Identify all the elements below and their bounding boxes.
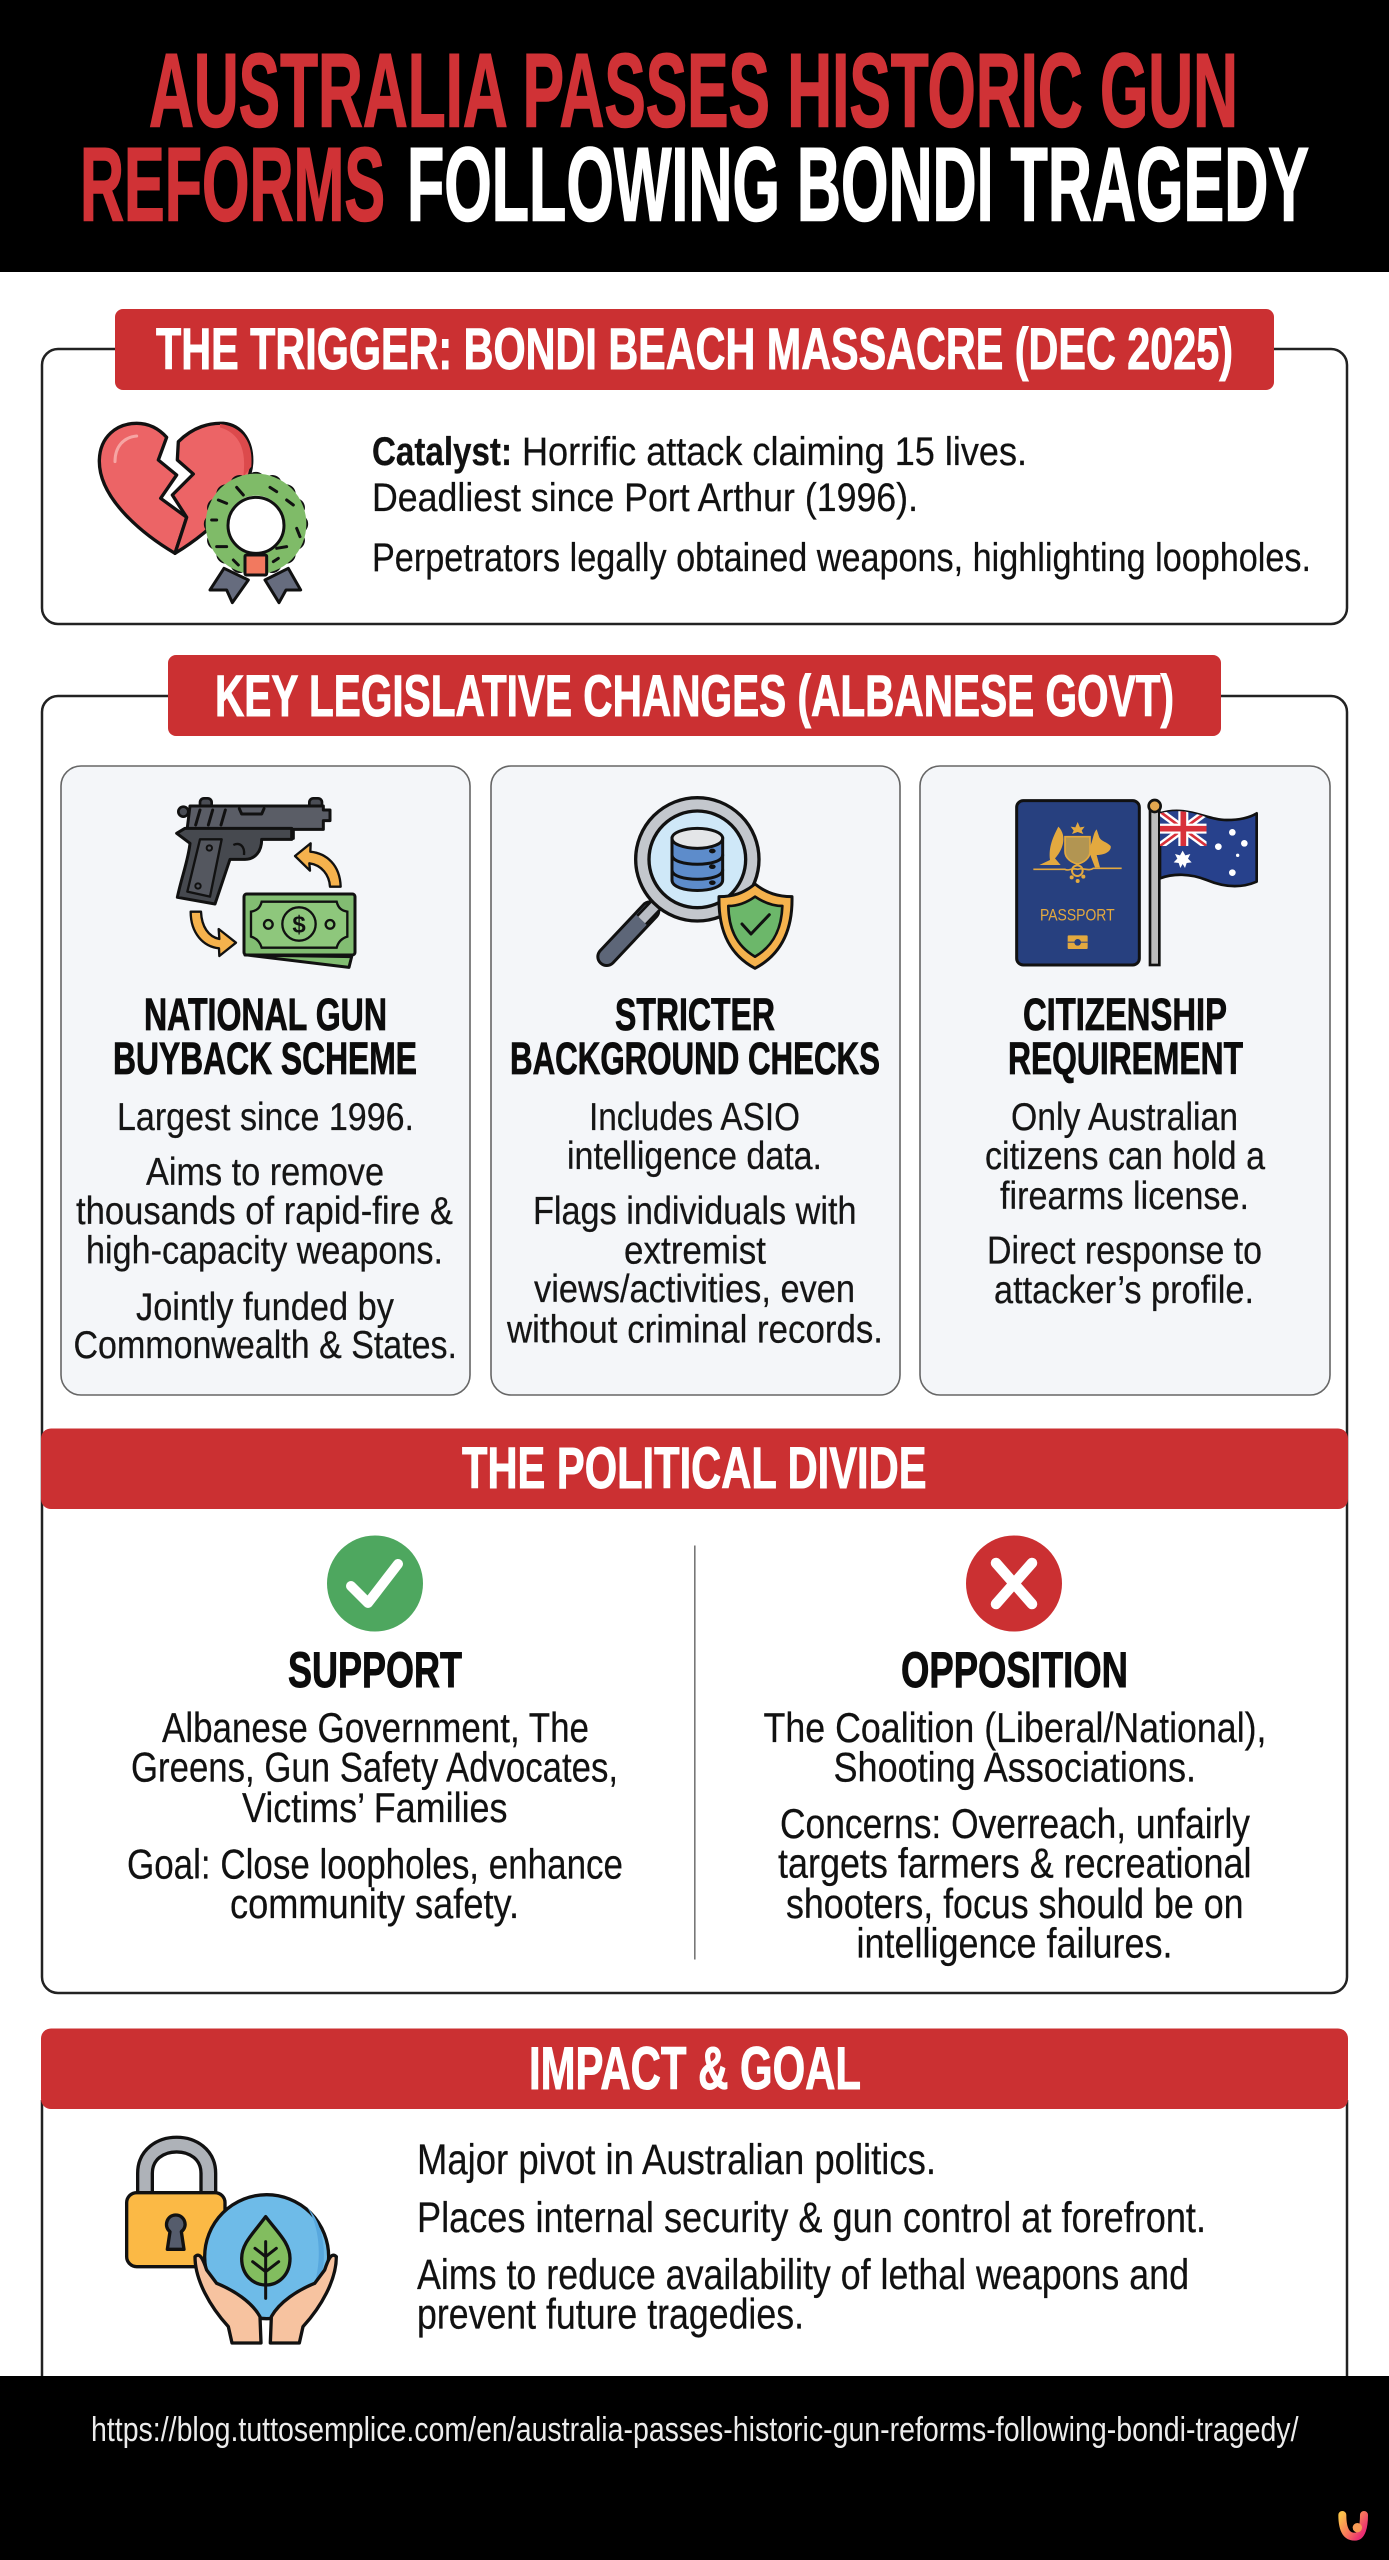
card text: views/activities, even [534, 1268, 855, 1311]
card heading: BACKGROUND CHECKS [510, 1033, 880, 1084]
heading: key legislative changes [168, 655, 1221, 736]
card text: Commonwealth & States. [74, 1324, 457, 1367]
card text: thousands of rapid-fire & [76, 1190, 453, 1233]
card text: extremist [624, 1230, 766, 1272]
card: citizenship requirement [920, 766, 1330, 1395]
footer [0, 2376, 1389, 2560]
card heading: REQUIREMENT [1008, 1033, 1243, 1084]
card text: Includes ASIO [589, 1096, 800, 1139]
column: support [127, 1536, 623, 1927]
heading: impact and goal [41, 2028, 1348, 2109]
card text [985, 1096, 1266, 1312]
text: catalyst: Horrific attack claiming 15 lives. [522, 430, 1027, 474]
card text: Aims to remove [146, 1151, 384, 1194]
card heading: NATIONAL GUN [144, 989, 387, 1040]
card text: firearms license. [1000, 1175, 1249, 1218]
text: impact: prevent future tragedies. [417, 2290, 804, 2338]
icon: pistol and cash swap [177, 798, 355, 967]
card text [74, 1096, 457, 1367]
heading: the political divide: THE POLITICAL DIVIDE [462, 1436, 926, 1501]
icon: red cross [966, 1536, 1062, 1632]
card text: citizens can hold a [985, 1135, 1266, 1178]
icon: padlock and leaf globe in hands [127, 2145, 336, 2343]
support heading: SUPPORT [288, 1642, 462, 1698]
card text: Direct response to [987, 1230, 1262, 1272]
card text: Flags individuals with [533, 1190, 856, 1233]
opposition text: shooters, focus should be on [786, 1880, 1244, 1927]
heading: impact and goal: IMPACT & GOAL [529, 2035, 861, 2102]
title: REFORMS [80, 126, 385, 244]
card text: Only Australian [1011, 1096, 1238, 1139]
panel: impact and goal [41, 2028, 1348, 2378]
card: stricter background checks [491, 766, 900, 1395]
support text: Victims’ Families [242, 1784, 508, 1831]
card text: without criminal records. [506, 1308, 883, 1352]
opposition text: Shooting Associations. [834, 1744, 1196, 1790]
card text: Jointly funded by [136, 1286, 395, 1329]
opposition heading: OPPOSITION [901, 1642, 1128, 1698]
icon: green check [327, 1536, 423, 1632]
card text: attacker’s profile. [994, 1269, 1254, 1312]
card text: high-capacity weapons. [86, 1230, 443, 1272]
icon: magnifier with database and shield [607, 798, 792, 968]
panel: key legislative changes and political divide [41, 655, 1348, 1993]
icon: passport and australian flag: PASSPORT [1040, 906, 1115, 925]
card heading: STRICTER [615, 989, 775, 1040]
text: catalyst: Catalyst: [372, 430, 512, 474]
card heading [1008, 989, 1243, 1084]
text: impact: Major pivot in Australian politics. [417, 2136, 936, 2184]
title [80, 32, 1309, 244]
panel: the trigger [42, 309, 1347, 624]
support text: Greens, Gun Safety Advocates, [131, 1744, 618, 1790]
support text [127, 1704, 623, 1927]
text: impact [417, 2136, 1206, 2338]
column: opposition [764, 1536, 1266, 1966]
card text: Largest since 1996. [117, 1096, 414, 1139]
card: national gun buyback scheme [61, 766, 470, 1395]
divider [694, 1546, 696, 1960]
opposition text: targets farmers & recreational [778, 1840, 1252, 1886]
text: impact: Aims to reduce availability of lethal weapons and [417, 2251, 1189, 2299]
support text: Goal: Close loopholes, enhance [127, 1840, 623, 1888]
card heading: CITIZENSHIP [1023, 989, 1227, 1040]
opposition text: The Coalition (Liberal/National), [764, 1704, 1266, 1751]
heading: the political divide [41, 1428, 1348, 1509]
text: catalyst: Deadliest since Port Arthur (1996). [372, 476, 918, 520]
opposition text: Concerns: Overreach, unfairly [780, 1800, 1250, 1847]
icon: logo [1342, 2515, 1364, 2537]
header banner [0, 0, 1389, 272]
icon: pistol and cash swap: $ [292, 912, 306, 939]
opposition text: intelligence failures. [856, 1920, 1172, 1966]
icon: broken heart and wreath [99, 423, 307, 603]
support text: community safety. [230, 1880, 519, 1927]
card heading: BUYBACK SCHEME [113, 1033, 417, 1084]
card text [506, 1096, 883, 1352]
text: impact: Places internal security & gun control at forefront. [417, 2194, 1206, 2242]
card heading [510, 989, 880, 1084]
opposition text [764, 1704, 1266, 1966]
card text: intelligence data. [567, 1135, 822, 1178]
text: catalyst [372, 430, 1311, 580]
icon: passport and australian flag [1017, 800, 1257, 965]
support text: Albanese Government, The [162, 1704, 589, 1751]
card heading [113, 989, 417, 1084]
